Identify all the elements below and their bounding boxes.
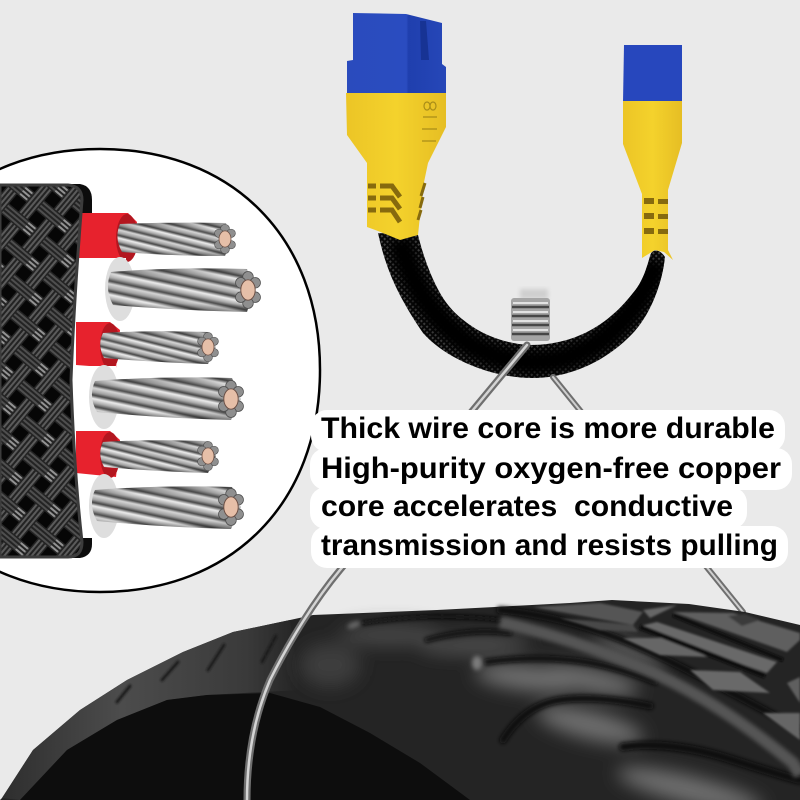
caption line 1: Thick wire core is more durable bbox=[321, 412, 775, 445]
caption line 4: transmission and resists pulling bbox=[321, 529, 778, 562]
wire 4 white bbox=[76, 365, 243, 429]
left connector marking bbox=[422, 102, 437, 141]
wire 6 white bbox=[76, 474, 243, 538]
braided sleeve bbox=[0, 185, 82, 557]
tread highlights bbox=[300, 625, 766, 800]
tread blocks bbox=[533, 603, 800, 740]
tyre grooves bbox=[363, 610, 800, 780]
right connector blue head bbox=[623, 45, 682, 102]
tyre sidewall bbox=[2, 620, 300, 800]
sleeve end cap bottom bbox=[60, 537, 92, 558]
right connector yellow body bbox=[623, 101, 682, 260]
sidewall marks bbox=[117, 636, 276, 702]
right connector bbox=[623, 45, 682, 260]
wire 1 red bbox=[76, 213, 235, 262]
left connector grip slots bbox=[368, 183, 425, 222]
magnified detail circle bbox=[0, 149, 320, 592]
wire coil bbox=[511, 289, 550, 341]
wire 2 white bbox=[76, 257, 260, 321]
caption line 3: core accelerates conductive bbox=[321, 490, 733, 523]
caption line 2: High-purity oxygen-free copper bbox=[321, 452, 781, 485]
tyre silhouette bbox=[0, 600, 800, 800]
left wire strand bbox=[247, 345, 527, 800]
tread band bbox=[500, 622, 800, 775]
wire 3 red bbox=[76, 322, 218, 369]
circle fill and outline bbox=[0, 149, 320, 592]
left OBD connector bbox=[346, 13, 446, 240]
left connector latch bbox=[420, 21, 429, 60]
left connector yellow body bbox=[346, 93, 446, 240]
caption text bbox=[321, 412, 781, 562]
text halo bbox=[310, 410, 792, 568]
left connector blue head bbox=[347, 13, 446, 95]
tyre inner dark rim bbox=[20, 693, 470, 800]
tread glints bbox=[346, 620, 482, 670]
sleeve end cap top bbox=[60, 184, 92, 213]
wire 5 red bbox=[76, 431, 218, 478]
right connector grip slots bbox=[644, 198, 668, 234]
connector cable with braided sleeve bbox=[378, 233, 665, 378]
right wire strand bbox=[553, 377, 743, 612]
tyre bbox=[0, 600, 800, 800]
